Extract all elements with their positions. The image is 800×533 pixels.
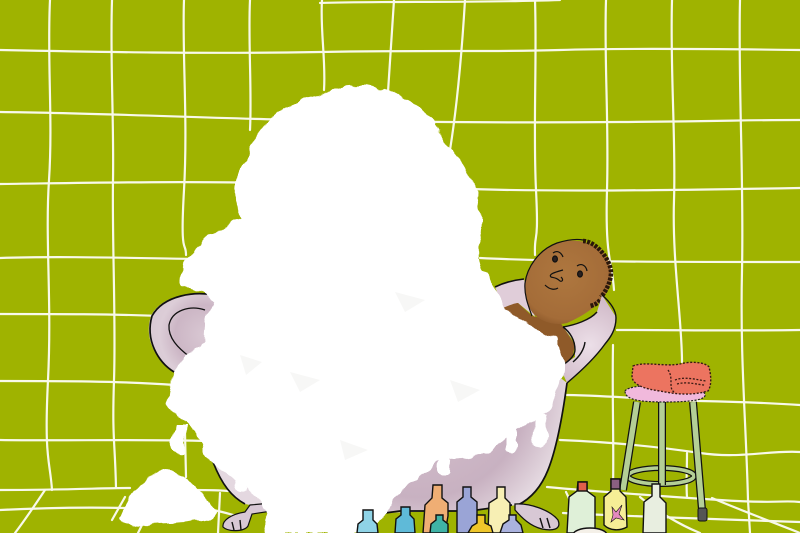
bottle: clear white	[643, 484, 666, 533]
bathtub	[149, 293, 567, 531]
foam mountain	[167, 85, 564, 533]
bottle: periwinkle	[457, 487, 477, 533]
bottle: cream	[488, 487, 510, 533]
bottle: white cap at bottom edge	[573, 528, 607, 533]
folded towel	[632, 362, 711, 394]
foam pile on floor	[120, 470, 216, 524]
tub body	[213, 330, 567, 515]
tub foot left	[223, 503, 272, 531]
tub foot right	[515, 504, 559, 530]
face: eyes, brows, nose and mouth	[545, 252, 587, 289]
foam drips	[172, 415, 548, 491]
tub handle: left ear	[149, 293, 240, 375]
bottle: yellow	[468, 515, 493, 533]
bottle: lavender	[500, 515, 523, 533]
bottle: orange	[423, 485, 448, 533]
stool	[623, 385, 707, 521]
foam texture	[240, 292, 480, 460]
stool legs and ring	[623, 402, 702, 510]
head	[525, 241, 611, 324]
bottles	[357, 479, 666, 533]
chest and neck	[503, 303, 575, 370]
stool seat	[625, 385, 705, 402]
tub rim behind head	[495, 279, 535, 317]
person in tub	[495, 239, 616, 383]
bottle: pale green large	[567, 482, 595, 533]
hair	[583, 241, 611, 306]
bottle: blue	[395, 507, 415, 533]
headrest: right tub rim	[560, 295, 616, 383]
bottle: yellow star label	[604, 479, 627, 530]
bottle: light blue small	[357, 510, 378, 533]
bottle: teal	[430, 515, 448, 533]
